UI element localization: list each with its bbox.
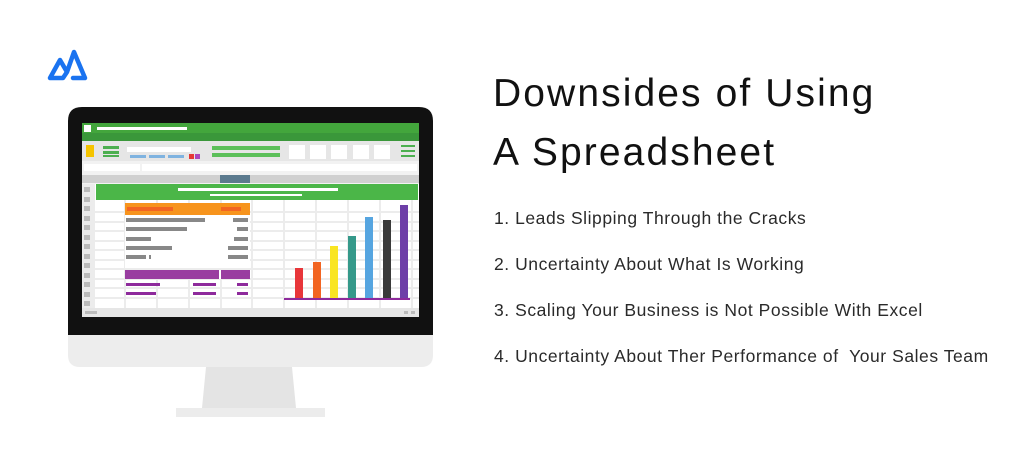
title [493,72,875,174]
monitor illustration [68,107,433,417]
list item 2: 2. Uncertainty About What Is Working [494,254,804,274]
icon: logo [48,50,88,80]
bar chart [284,205,410,300]
list item 4: 4. Uncertainty About Ther Performance of Your Sales Team [494,346,989,366]
title: A Spreadsheet [493,131,776,174]
list item 1: 1. Leads Slipping Through the Cracks [494,208,806,228]
monitor body [68,107,433,367]
stand [176,367,325,417]
list item 3: 3. Scaling Your Business is Not Possible With Excel [494,300,923,320]
title: Downsides of Using [493,72,875,115]
